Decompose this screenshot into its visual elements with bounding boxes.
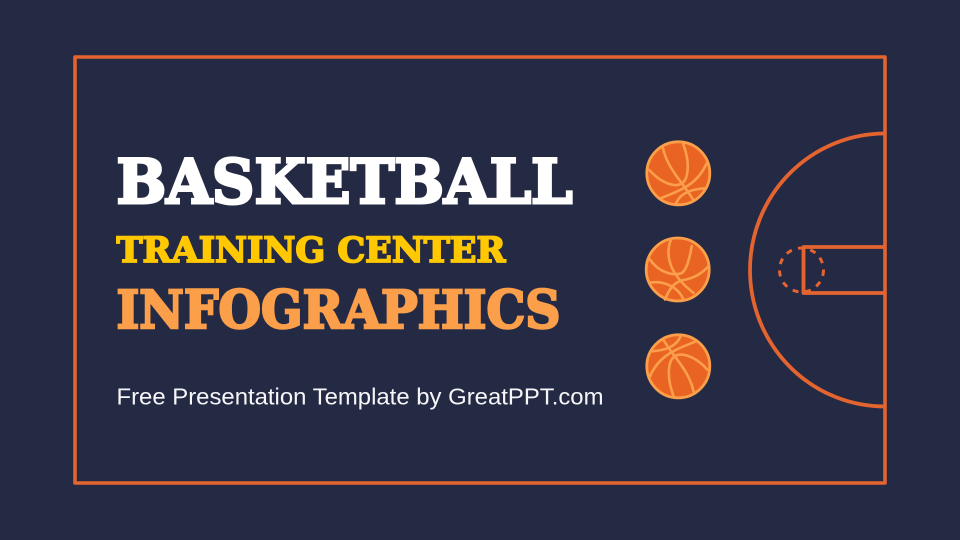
- title: BASKETBALL: BASKETBALL: [116, 147, 572, 218]
- court: dashed circle: [780, 248, 824, 292]
- icon: basketball middle: [646, 238, 709, 301]
- tagline: Free Presentation Template by GreatPPT.com: [116, 384, 604, 410]
- icon: basketball top: [647, 142, 710, 205]
- subtitle: TRAINING CENTER: TRAINING CENTER: [116, 230, 506, 271]
- court: half circle, key and hoop area: [750, 134, 885, 406]
- court: key rectangle: [804, 247, 885, 293]
- icon: basketball bottom: [647, 335, 710, 398]
- title: INFOGRAPHICS: INFOGRAPHICS: [116, 280, 560, 341]
- court: boundary frame: [75, 57, 885, 483]
- court: three point arc: [750, 134, 885, 406]
